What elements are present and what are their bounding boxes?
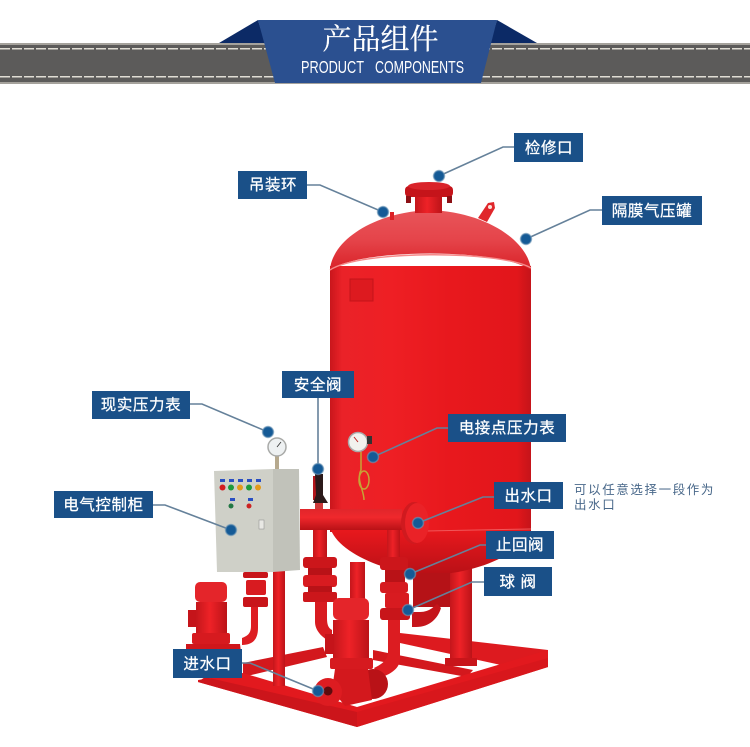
callout: 出水口: 出水口 [504, 487, 553, 505]
title english: PRODUCT [301, 57, 364, 77]
tank body [330, 210, 531, 607]
callout: 球阀: 球 阀 [499, 573, 537, 591]
title english [301, 57, 464, 77]
callout: 球阀 [402, 567, 552, 616]
callout: 电气控制柜 [54, 491, 236, 536]
callout: 止回阀 [404, 531, 554, 580]
vertical pipes and valves [303, 530, 441, 678]
callout: 隔膜气压罐: 隔膜气压罐 [612, 202, 692, 220]
callout: 电气控制柜: 电气控制柜 [63, 496, 144, 514]
left pump [186, 572, 268, 660]
callout: 检修口: 检修口 [525, 139, 573, 157]
header banner [0, 20, 750, 84]
electric contact gauge [348, 432, 372, 500]
lifting lugs [390, 202, 495, 222]
callout: 吊装环: 吊装环 [249, 176, 297, 194]
safety valve [313, 474, 328, 509]
centre pump [314, 598, 388, 706]
outlet header pipe [300, 502, 429, 544]
electrical control cabinet [214, 469, 300, 572]
illustration: pressure tank system [186, 182, 548, 727]
callout: 隔膜气压罐 [520, 196, 702, 244]
callout: 进水口: 进水口 [183, 655, 232, 673]
tank legs [350, 562, 477, 666]
side note: 可以任意选择一段作为 [574, 482, 715, 497]
ribbon folds [219, 20, 537, 43]
callout: 电接点压力表 [368, 414, 566, 462]
callout: 安全阀: 安全阀 [294, 376, 342, 394]
title english: COMPONENTS [375, 57, 464, 77]
road band [0, 43, 750, 84]
left frame post [273, 570, 285, 686]
inspection port [405, 182, 453, 213]
callout: 进水口 [173, 649, 324, 696]
title chinese: 产品组件 [322, 23, 438, 56]
callout: 安全阀 [282, 371, 354, 474]
callout: 止回阀: 止回阀 [496, 536, 544, 554]
callout: 检修口 [434, 133, 583, 182]
title panel [258, 20, 497, 83]
side note: 出水口 [574, 498, 616, 512]
top pressure gauge [268, 438, 286, 469]
callout: 吊装环 [238, 171, 388, 218]
callout: 电接点压力表: 电接点压力表 [459, 419, 555, 437]
callout: 现实压力表: 现实压力表 [101, 396, 181, 414]
base frame [198, 633, 548, 727]
callout: 现实压力表 [92, 391, 274, 438]
callout: 出水口 [412, 482, 563, 528]
